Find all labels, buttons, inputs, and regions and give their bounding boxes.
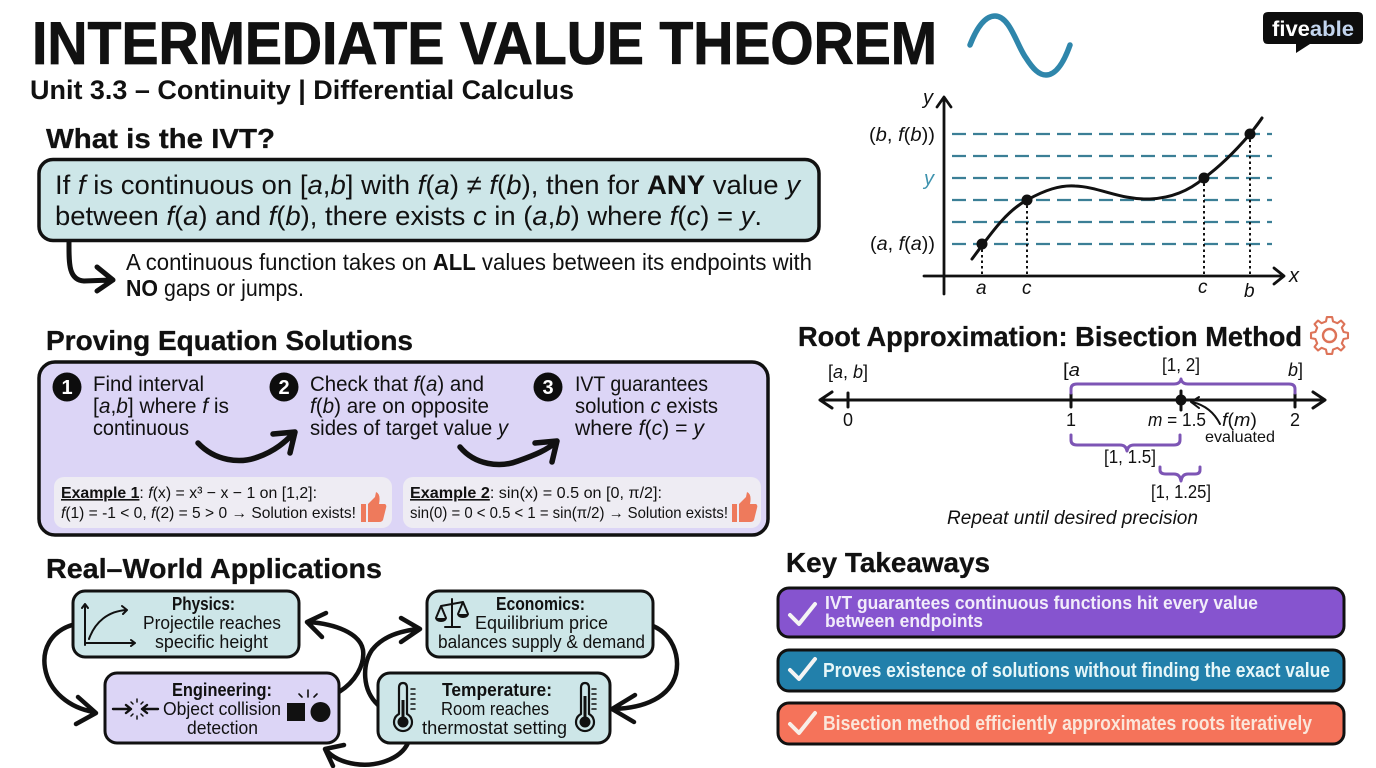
icon: thermometer right <box>576 683 596 731</box>
label: 1, 1.5 interval: [1, 1.5] <box>1104 447 1156 467</box>
definition text line 1: If f is continuous on [a,b] with f(a) ≠ f(b), then for ANY value y <box>55 170 802 200</box>
step 2: f(b) are on opposite <box>310 395 489 418</box>
arrow: economics to temperature <box>612 626 677 722</box>
step 2 <box>270 372 509 440</box>
takeaway 1: IVT guarantees continuous functions hit every value <box>825 592 1258 613</box>
step 3: where f(c) = y <box>574 417 706 440</box>
heading: proving equation solutions: Proving Equation Solutions <box>46 325 413 356</box>
step 3: solution c exists <box>575 395 718 418</box>
callout: f(m) evaluated <box>1205 410 1275 446</box>
explanation text: NO gaps or jumps. <box>126 275 304 301</box>
icon: gear <box>1311 317 1348 354</box>
definition text line 2: between f(a) and f(b), there exists c in (a,b) where f(c) = y. <box>55 201 762 231</box>
arrow: temperature to engineering <box>325 743 408 766</box>
takeaway 3 <box>778 703 1344 744</box>
icon: projectile graph <box>82 604 135 646</box>
step 1: continuous <box>93 417 189 440</box>
chart: IVT function graph: b <box>1244 281 1255 302</box>
card: economics <box>427 591 653 657</box>
icon: collision arrows <box>113 699 158 719</box>
steps box <box>39 362 768 535</box>
takeaway 3: Bisection method efficiently approximates roots iteratively <box>823 713 1313 735</box>
callout: f(m) evaluated: f(m) <box>1222 410 1257 430</box>
subtitle: Unit 3.3 – Continuity | Differential Calculus <box>30 75 574 105</box>
card: physics: Physics: <box>172 594 235 614</box>
card: temperature <box>378 673 610 743</box>
card: physics: specific height <box>155 632 268 652</box>
chart: IVT function graph: (a, f(a)) <box>870 234 935 255</box>
example 1 <box>54 477 392 528</box>
card: physics: Projectile reaches <box>143 613 281 633</box>
takeaway 1 <box>778 588 1344 637</box>
panel: what is the IVT <box>39 123 819 301</box>
caption: repeat until desired precision: Repeat until desired precision <box>947 508 1198 529</box>
icon: thumbs up <box>732 492 757 522</box>
step 3: IVT guarantees <box>575 373 708 396</box>
example 1: Example 1: f(x) = x³ − x − 1 on [1,2]: <box>61 485 317 502</box>
chart: IVT function graph <box>869 87 1300 302</box>
arrow: definition to explanation <box>69 242 113 291</box>
arrow: f(m) to midpoint <box>1191 397 1220 424</box>
logo: fiveable: fiveable <box>1272 17 1354 41</box>
icon: thumbs up <box>361 492 386 522</box>
card: engineering: Engineering: <box>172 680 272 700</box>
heading: bisection method: Root Approximation: Bisection Method <box>798 321 1302 352</box>
card: temperature: thermostat setting <box>422 718 567 738</box>
heading: real-world applications: Real–World Applications <box>46 553 382 584</box>
title: INTERMEDIATE VALUE THEOREM <box>32 10 937 77</box>
number line <box>820 391 1325 430</box>
arrow: step 2 to 3 <box>460 441 557 464</box>
heading: key takeaways: Key Takeaways <box>786 547 990 578</box>
icon: balance scale <box>435 599 469 627</box>
chart: IVT function graph: c <box>1022 278 1032 299</box>
label: right bracket b: b] <box>1288 360 1303 380</box>
heading: what is the IVT: What is the IVT? <box>46 123 275 154</box>
panel: proving equation solutions <box>39 325 768 535</box>
chart: IVT function graph: y <box>921 87 934 109</box>
label: a, b interval: [a, b] <box>828 362 868 382</box>
card: engineering <box>105 673 339 743</box>
arrow: step 1 to 2 <box>198 432 295 460</box>
chart: IVT function graph: (b, f(b)) <box>869 125 935 146</box>
step 1: 1 <box>61 377 73 399</box>
step 1 <box>52 372 229 440</box>
brace: 1 to 1.5 <box>1071 435 1180 451</box>
brace: 1 to 2 <box>1071 379 1295 393</box>
step 2: 2 <box>278 377 290 399</box>
definition box <box>39 160 819 240</box>
step 3: 3 <box>542 377 554 399</box>
card: engineering: Object collision <box>163 699 281 719</box>
example 2 <box>403 477 761 528</box>
example 1: f(1) = -1 < 0, f(2) = 5 > 0 → Solution exists! <box>61 505 356 522</box>
takeaway 2 <box>778 650 1344 691</box>
chart: IVT function graph: y <box>922 168 935 190</box>
step 2: Check that f(a) and <box>310 373 484 396</box>
label: 1, 1.25 interval: [1, 1.25] <box>1151 482 1211 502</box>
card: economics: Economics: <box>496 594 585 614</box>
card: temperature: Room reaches <box>441 699 549 719</box>
explanation text <box>126 249 812 301</box>
step 2: sides of target value y <box>310 417 509 440</box>
step 1: [a,b] where f is <box>93 395 229 418</box>
card: physics <box>73 591 299 657</box>
chart: IVT function graph: x <box>1288 265 1300 287</box>
number line: 0 <box>843 410 853 430</box>
chart: IVT function graph: c <box>1198 277 1208 298</box>
arrow: engineering to physics <box>307 613 363 692</box>
panel: bisection method <box>798 317 1348 529</box>
example 2: Example 2: sin(x) = 0.5 on [0, π/2]: <box>410 485 662 502</box>
chart: IVT function graph: a <box>976 278 987 299</box>
card: temperature: Temperature: <box>442 680 552 700</box>
panel: real-world applications <box>44 553 677 766</box>
step 1: Find interval <box>93 373 204 396</box>
step 3 <box>534 372 718 440</box>
card: economics: balances supply & demand <box>438 632 645 652</box>
icon: thermometer left <box>394 683 415 731</box>
icon: sine wave <box>970 16 1070 75</box>
callout: f(m) evaluated: evaluated <box>1205 429 1275 446</box>
number line: m = 1.5 <box>1148 410 1206 430</box>
number line: 2 <box>1290 410 1300 430</box>
example 2: sin(0) = 0 < 0.5 < 1 = sin(π/2) → Solution exists! <box>410 505 728 522</box>
takeaway 1: between endpoints <box>825 610 983 631</box>
icon: square and circle impact <box>287 690 330 722</box>
label: left bracket a: [a <box>1063 360 1080 380</box>
number line: 1 <box>1066 410 1076 430</box>
card: engineering: detection <box>187 718 258 738</box>
logo: fiveable <box>1263 12 1363 53</box>
arrow: temperature to economics <box>365 618 420 705</box>
card: economics: Equilibrium price <box>475 613 608 633</box>
explanation text: A continuous function takes on ALL values between its endpoints with <box>126 249 812 275</box>
label: 1, 2 interval: [1, 2] <box>1162 355 1200 375</box>
brace: 1 to 1.25 <box>1160 467 1200 481</box>
panel: key takeaways <box>778 547 1344 744</box>
arrow: physics to engineering <box>44 625 96 724</box>
